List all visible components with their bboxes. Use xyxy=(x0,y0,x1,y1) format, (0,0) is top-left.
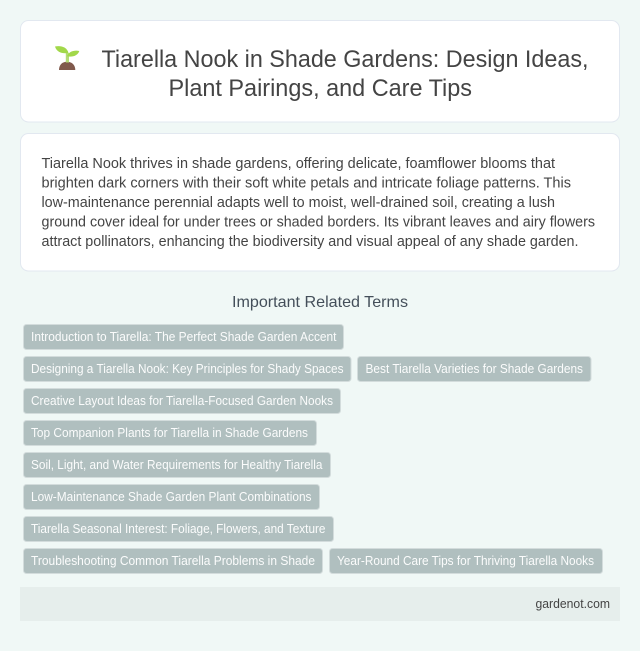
tag: Troubleshooting Common Tiarella Problems in Shade xyxy=(31,554,315,568)
tag: Creative Layout Ideas for Tiarella-Focused Garden Nooks xyxy=(31,394,333,408)
title: Plant Pairings, and Care Tips xyxy=(168,75,472,102)
description text: Tiarella Nook thrives in shade gardens, offering delicate, foamflower blooms that xyxy=(42,155,556,172)
panel: header card xyxy=(20,20,620,122)
title: Tiarella Nook in Shade Gardens: Design Ideas, xyxy=(102,46,588,73)
tag xyxy=(24,356,351,382)
tag: Introduction to Tiarella: The Perfect Shade Garden Accent xyxy=(31,330,337,344)
panel: description card xyxy=(20,134,620,271)
tag: Designing a Tiarella Nook: Key Principles for Shady Spaces xyxy=(31,362,344,376)
tag xyxy=(24,324,344,350)
heading: related terms: Important Related Terms xyxy=(232,294,408,311)
title xyxy=(102,46,588,102)
tag: Best Tiarella Varieties for Shade Gardens xyxy=(366,362,583,376)
description text: attract pollinators, enhancing the biodiversity and visual appeal of any shade garden. xyxy=(42,233,578,250)
description text: low-maintenance perennial adapts well to moist, well-drained soil, creating a lush xyxy=(42,194,555,211)
tag xyxy=(24,388,340,414)
description text xyxy=(42,155,595,250)
tag: Soil, Light, and Water Requirements for Healthy Tiarella xyxy=(31,458,323,472)
tag: Year-Round Care Tips for Thriving Tiarella Nooks xyxy=(337,554,594,568)
tag xyxy=(24,452,330,478)
tag xyxy=(24,516,334,542)
tag: Top Companion Plants for Tiarella in Shade Gardens xyxy=(31,426,308,440)
tag list xyxy=(24,324,602,574)
tag xyxy=(330,548,602,574)
footer: gardenot.com xyxy=(536,597,610,611)
tag xyxy=(24,484,320,510)
description text: ground cover ideal for under trees or shaded borders. Its vibrant leaves and airy flowers xyxy=(42,214,595,230)
tag xyxy=(358,356,591,382)
description text: brighten dark corners with their soft white petals and intricate foliage patterns. This xyxy=(42,174,571,192)
tag xyxy=(24,420,316,446)
footer xyxy=(20,587,620,621)
tag: Low-Maintenance Shade Garden Plant Combinations xyxy=(31,490,312,504)
tag: Tiarella Seasonal Interest: Foliage, Flowers, and Texture xyxy=(31,522,326,536)
tag xyxy=(24,548,322,574)
icon: seedling xyxy=(55,46,79,70)
